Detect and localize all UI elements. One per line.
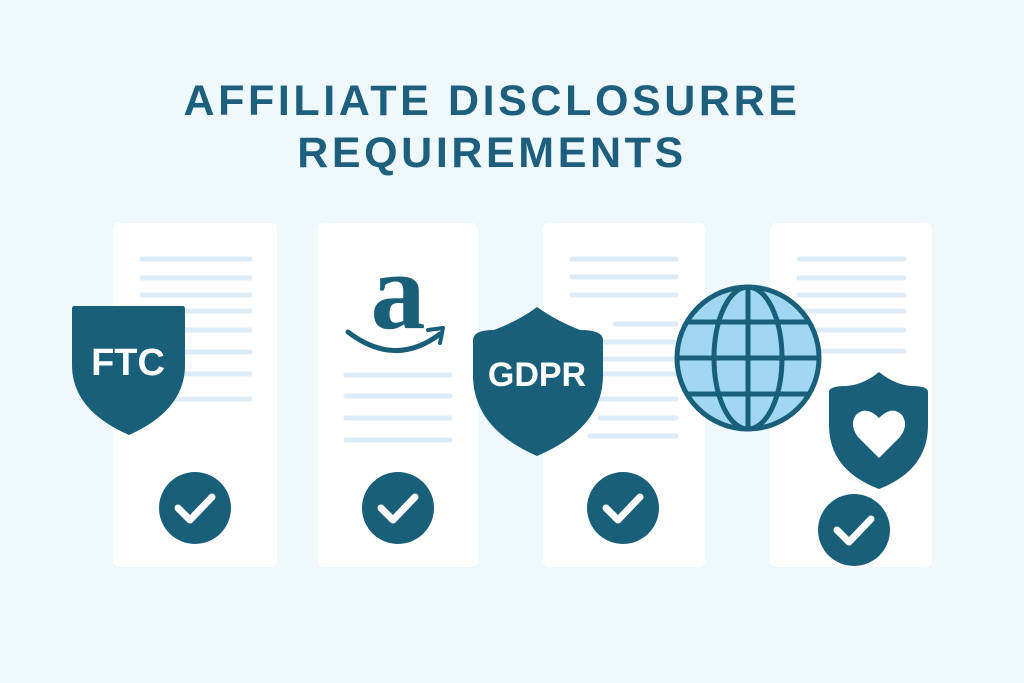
- icon: amazon logo: a: [370, 230, 426, 352]
- title: [183, 77, 801, 177]
- title: AFFILIATE DISCLOSURRE: [183, 77, 801, 125]
- icon: GDPR shield: GDPR: [488, 356, 586, 394]
- panel: FTC: [72, 223, 277, 567]
- panel: global privacy: [677, 223, 932, 567]
- icon: heart shield: [829, 372, 928, 489]
- icon: GDPR shield: [473, 307, 603, 456]
- panel: Amazon: [318, 223, 478, 567]
- icon: check: [587, 472, 659, 544]
- panel: GDPR: [473, 223, 705, 567]
- icon: globe: [677, 287, 819, 429]
- icon: check: [159, 472, 231, 544]
- icon: check: [362, 472, 434, 544]
- icon: FTC shield: FTC: [91, 342, 165, 384]
- title: REQUIREMENTS: [297, 129, 687, 177]
- icon: FTC shield: [72, 306, 185, 435]
- icon: amazon logo: [348, 230, 443, 352]
- icon: check: [818, 494, 890, 566]
